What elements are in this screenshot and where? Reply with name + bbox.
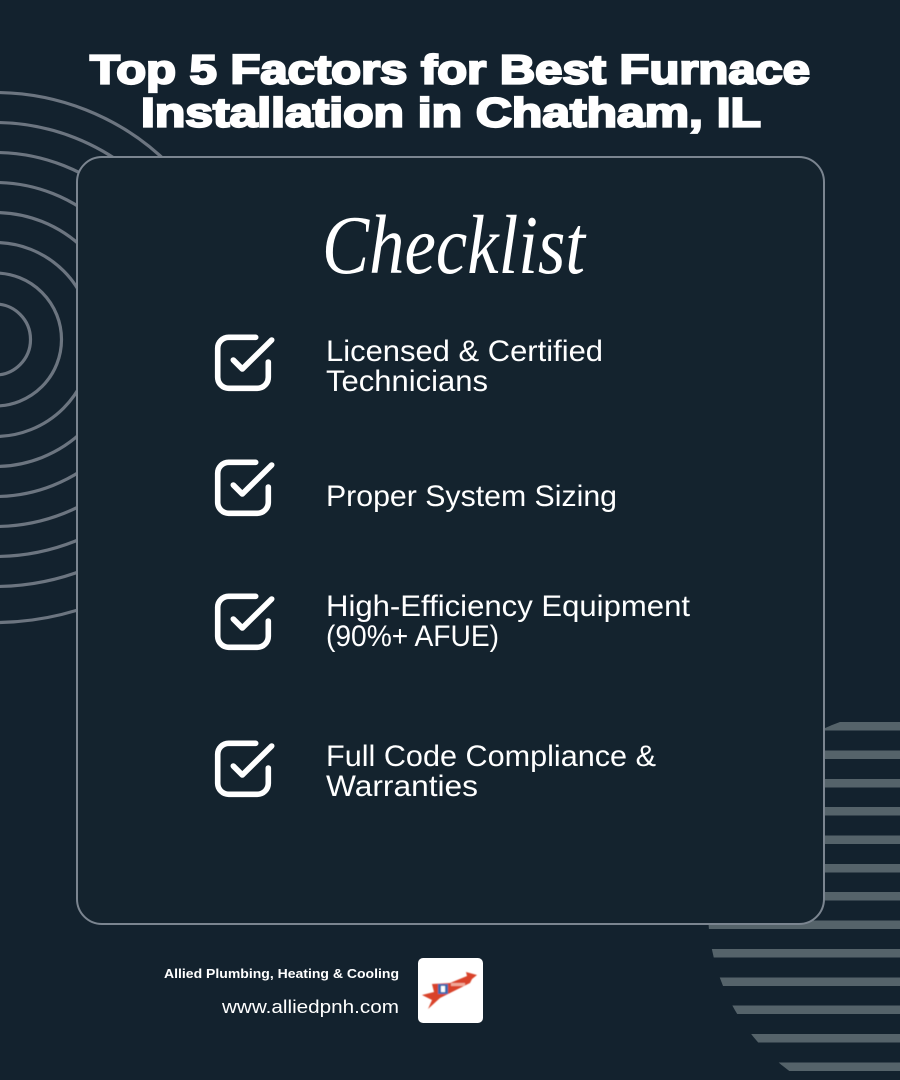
item 3 text: (90%+ AFUE): [326, 620, 499, 653]
item 2 text: Proper System Sizing: [326, 480, 617, 513]
panel: checklist: [77, 157, 824, 924]
icon: checkbox 1: [218, 337, 272, 388]
item 3 text: High-Efficiency Equipment: [326, 590, 691, 623]
item 3: high-efficiency equipment: [218, 590, 691, 653]
decorative horizontal stripes: [690, 722, 900, 1071]
item 1: licensed and certified technicians: [218, 335, 603, 398]
item 1 text: [326, 335, 603, 398]
item 1 text: Licensed & Certified: [326, 335, 603, 368]
footer website: www.alliedpnh.com: [221, 997, 399, 1017]
item 4 text: Full Code Compliance &: [326, 740, 656, 773]
item 2: proper system sizing: [218, 462, 617, 513]
heading: Checklist: Checklist: [322, 199, 587, 292]
icon: checkbox 2: [218, 462, 272, 513]
decorative concentric arcs: [0, 92, 242, 622]
icon: checkbox 3: [218, 596, 272, 647]
item 4: code compliance and warranties: [218, 740, 656, 803]
item 4 text: [326, 740, 656, 803]
logo: [418, 958, 483, 1023]
item 1 text: Technicians: [326, 365, 488, 398]
title: Installation in Chatham, IL: [141, 90, 761, 136]
item 4 text: Warranties: [326, 770, 478, 803]
title: Top 5 Factors for Best Furnace: [90, 46, 810, 92]
footer company name: Allied Plumbing, Heating & Cooling: [164, 966, 399, 981]
item 3 text: [326, 590, 691, 653]
title: [90, 46, 810, 136]
icon: checkbox 4: [218, 743, 272, 794]
